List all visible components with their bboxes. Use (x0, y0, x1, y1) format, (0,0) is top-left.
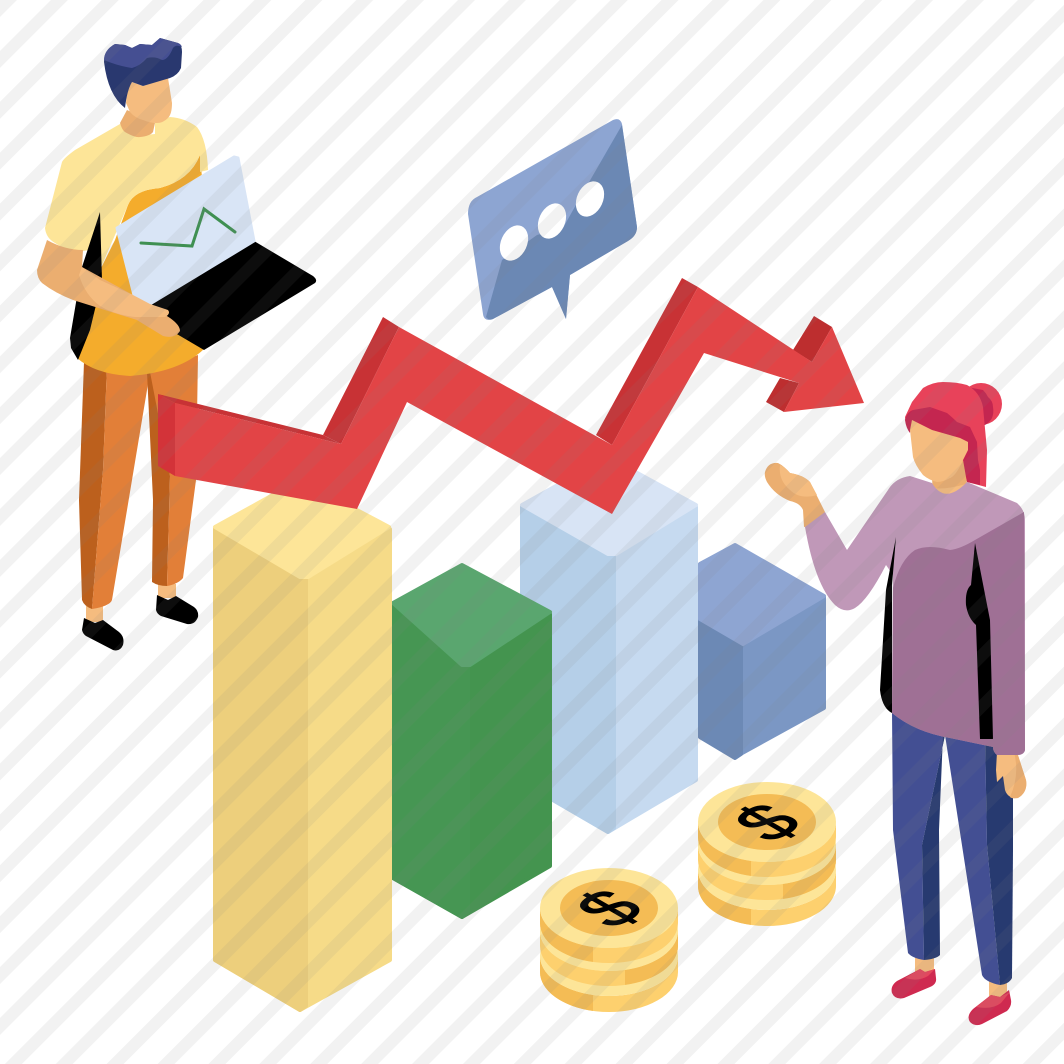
man: neck (120, 110, 155, 137)
woman: shoes (892, 969, 1011, 1025)
woman: sweater (805, 476, 1025, 755)
arrow: dark sides (158, 278, 832, 445)
coin stack: back (698, 782, 836, 926)
bar: blue cube (700, 545, 824, 758)
bubble: dots (494, 177, 610, 265)
man: arm (37, 240, 150, 328)
coin stack: front (540, 868, 678, 1012)
woman: right hand (996, 752, 1026, 798)
bubble: shade (486, 125, 637, 320)
bar: light blue (522, 457, 696, 832)
woman: hair (905, 382, 987, 487)
bar: yellow (215, 480, 390, 1010)
laptop (117, 157, 316, 350)
arrow: top face (175, 287, 864, 514)
woman (765, 382, 1026, 1025)
man: shoes (82, 595, 198, 650)
man: face (126, 78, 172, 123)
bar: green (393, 565, 550, 917)
coin stack: front: $ (558, 879, 660, 937)
arrow (158, 278, 864, 514)
woman: right black panel (966, 543, 993, 739)
woman: neck (932, 460, 967, 501)
man: back shadow (70, 212, 102, 360)
man: hair (104, 38, 182, 108)
woman: sweater shade (892, 512, 1025, 755)
woman: left black panel (880, 537, 896, 713)
woman: feet (915, 955, 1007, 998)
man: shirt body (77, 155, 204, 376)
coin stack: back: $ (716, 793, 818, 851)
man with laptop (37, 38, 316, 650)
woman: face (910, 420, 968, 482)
man: socks (86, 584, 176, 622)
man: hand (135, 305, 180, 337)
man: trousers (79, 355, 198, 609)
woman: raised hand (765, 463, 825, 527)
woman: neck highlight (933, 484, 966, 501)
woman: trousers (892, 712, 1013, 985)
arrow: tail end (158, 394, 175, 476)
woman: hair bun (960, 383, 1002, 425)
laptop: chart line (141, 209, 235, 246)
speech bubble (468, 119, 637, 320)
laptop: screen (117, 157, 254, 304)
man: shirt top (45, 117, 208, 265)
man: forearm (79, 267, 169, 317)
laptop: keyboard (150, 241, 316, 350)
